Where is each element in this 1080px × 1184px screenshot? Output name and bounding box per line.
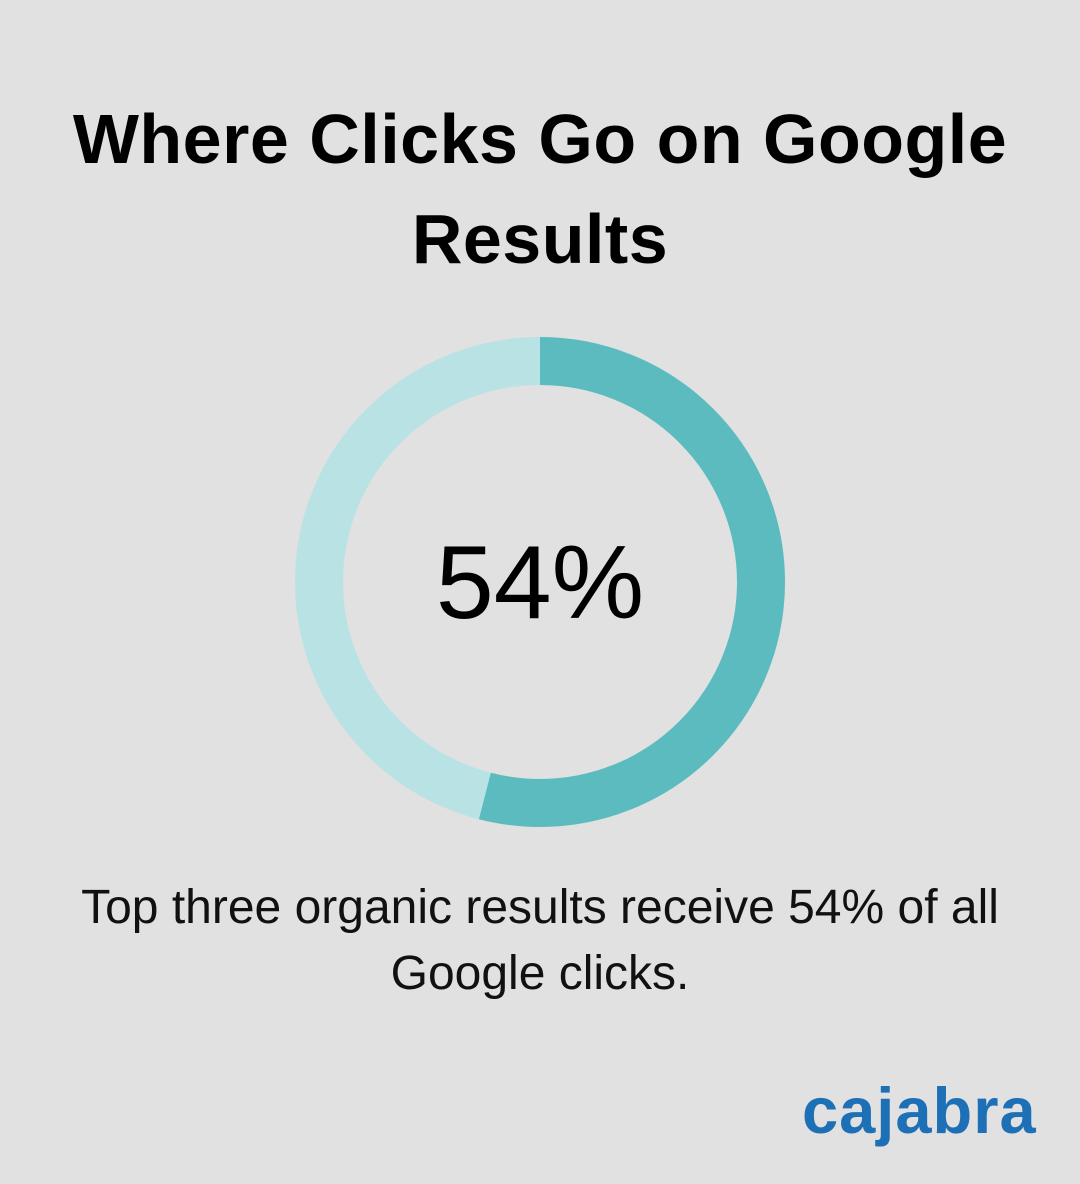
donut: remaining share	[319, 361, 761, 803]
title	[73, 100, 1007, 278]
caption: Top three organic results receive 54% of all	[81, 881, 999, 934]
title: Where Clicks Go on Google	[73, 100, 1007, 178]
title: Results	[412, 200, 668, 278]
donut: 54% arc	[319, 361, 761, 803]
caption: Google clicks.	[391, 947, 689, 1000]
logo: cajabra	[802, 1074, 1037, 1147]
center value: 54%	[436, 525, 644, 641]
caption	[81, 881, 999, 1000]
